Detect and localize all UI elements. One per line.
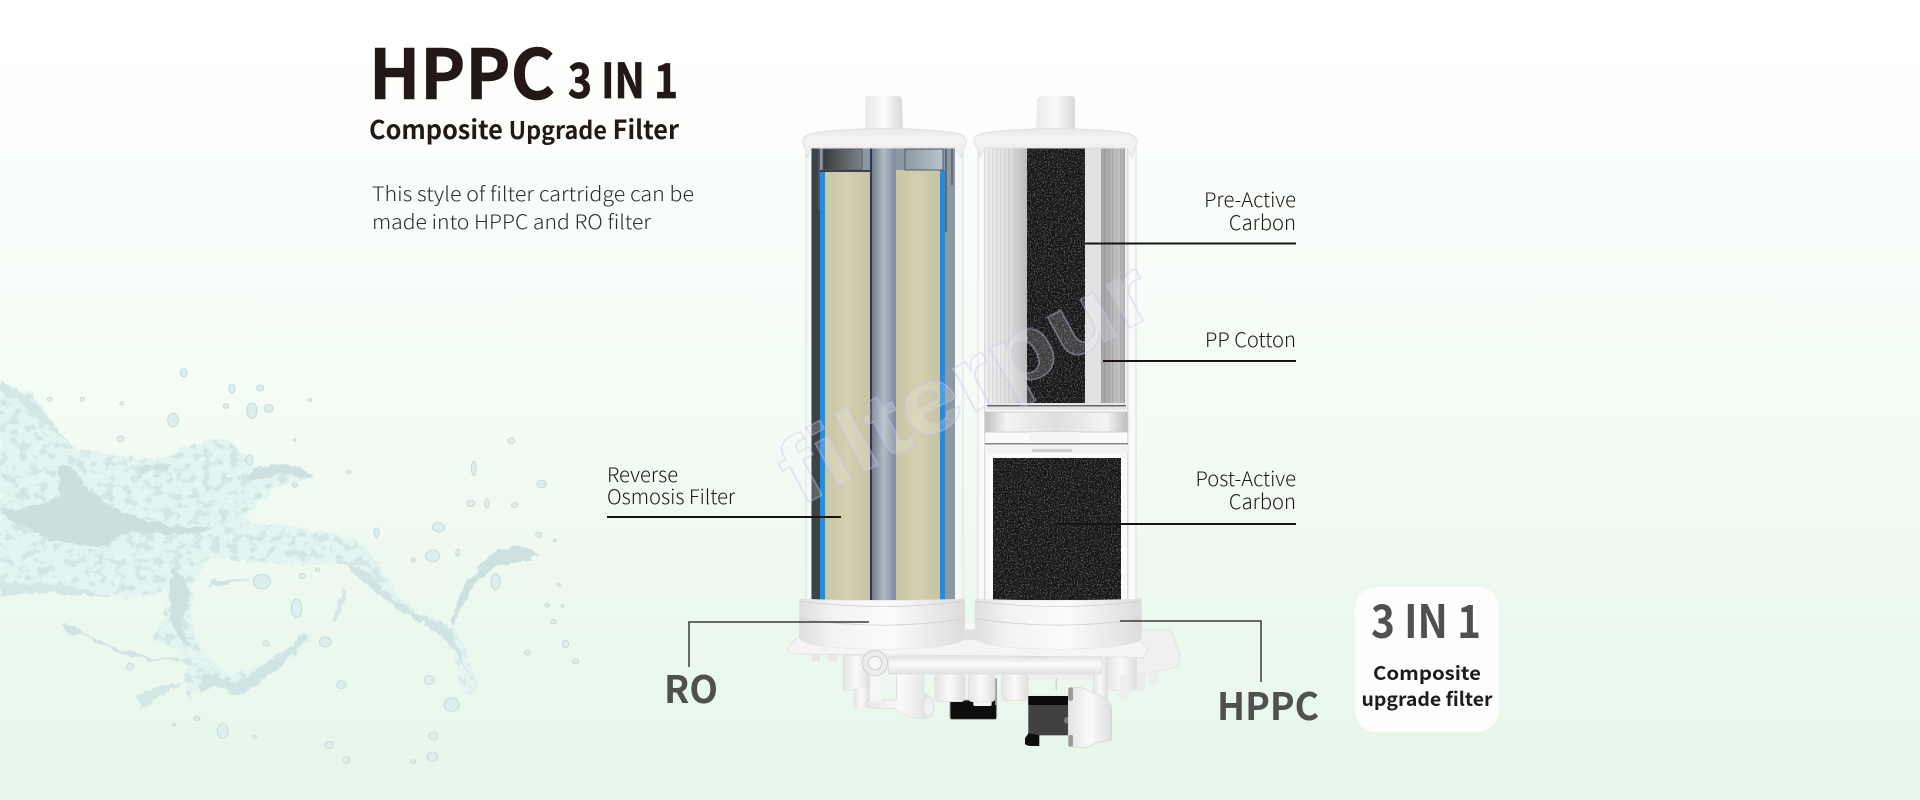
callout: 3 IN 1 composite upgrade filter: upgrade filter [1362,685,1493,712]
label: PP Cotton: PP Cotton [1205,324,1296,353]
pre-active and PP cotton layers [985,148,1127,403]
horizontal pipe [888,657,1102,674]
description text [372,178,694,235]
label: Reverse Osmosis Filter [607,459,841,517]
clear divider [985,403,1128,453]
left inner filter stack [811,148,955,600]
label: RO [664,622,869,714]
small solenoid [950,678,997,719]
icon: right top nipple [1036,96,1075,130]
water splash illustration [0,369,579,764]
label: Post-Active Carbon: Carbon [1229,486,1296,515]
label: Reverse Osmosis Filter: Osmosis Filter [607,481,736,510]
RO cartridge [803,96,966,610]
label: HPPC [1120,621,1319,731]
label: RO: RO [664,659,718,714]
ring connector [964,623,976,640]
description text: This style of filter cartridge can be [372,178,694,207]
label: HPPC: HPPC [1217,676,1319,731]
label: Pre-Active Carbon [1085,184,1296,244]
icon: left top nipple [865,96,903,130]
right clear shell [978,140,1136,610]
label: Pre-Active Carbon: Pre-Active [1204,184,1296,213]
large solenoid valve [1025,687,1112,748]
left ring [799,599,965,649]
label: Post-Active Carbon: Post-Active [1195,463,1296,492]
callout: 3 IN 1 composite upgrade filter [1355,586,1499,732]
label: Pre-Active Carbon: Carbon [1229,207,1296,236]
watermark: filterpur: filterpur [761,239,1170,525]
label: Reverse Osmosis Filter: Reverse [607,459,678,488]
icon: round port [862,650,888,676]
right ring [975,599,1142,649]
base manifold [788,599,1179,748]
title: HPPC [369,19,555,119]
left top cap [803,128,966,158]
label: Post-Active Carbon [1055,463,1296,524]
title [369,19,678,119]
base plate [788,637,1147,657]
callout: 3 IN 1 composite upgrade filter: Composite [1373,659,1481,686]
elbow fitting [866,672,934,719]
callout: 3 IN 1 composite upgrade filter: 3 IN 1 [1371,586,1481,652]
title: 3 IN 1 [568,42,678,112]
description text: made into HPPC and RO filter [372,206,652,235]
HPPC cartridge [974,96,1137,610]
post-active carbon block [993,458,1121,600]
right top cap [974,128,1137,158]
left lower block [812,655,870,708]
left clear shell [806,140,963,610]
connector stubs [935,655,1158,702]
right extension [1127,630,1179,673]
subtitle: Composite Upgrade Filter [369,110,680,147]
